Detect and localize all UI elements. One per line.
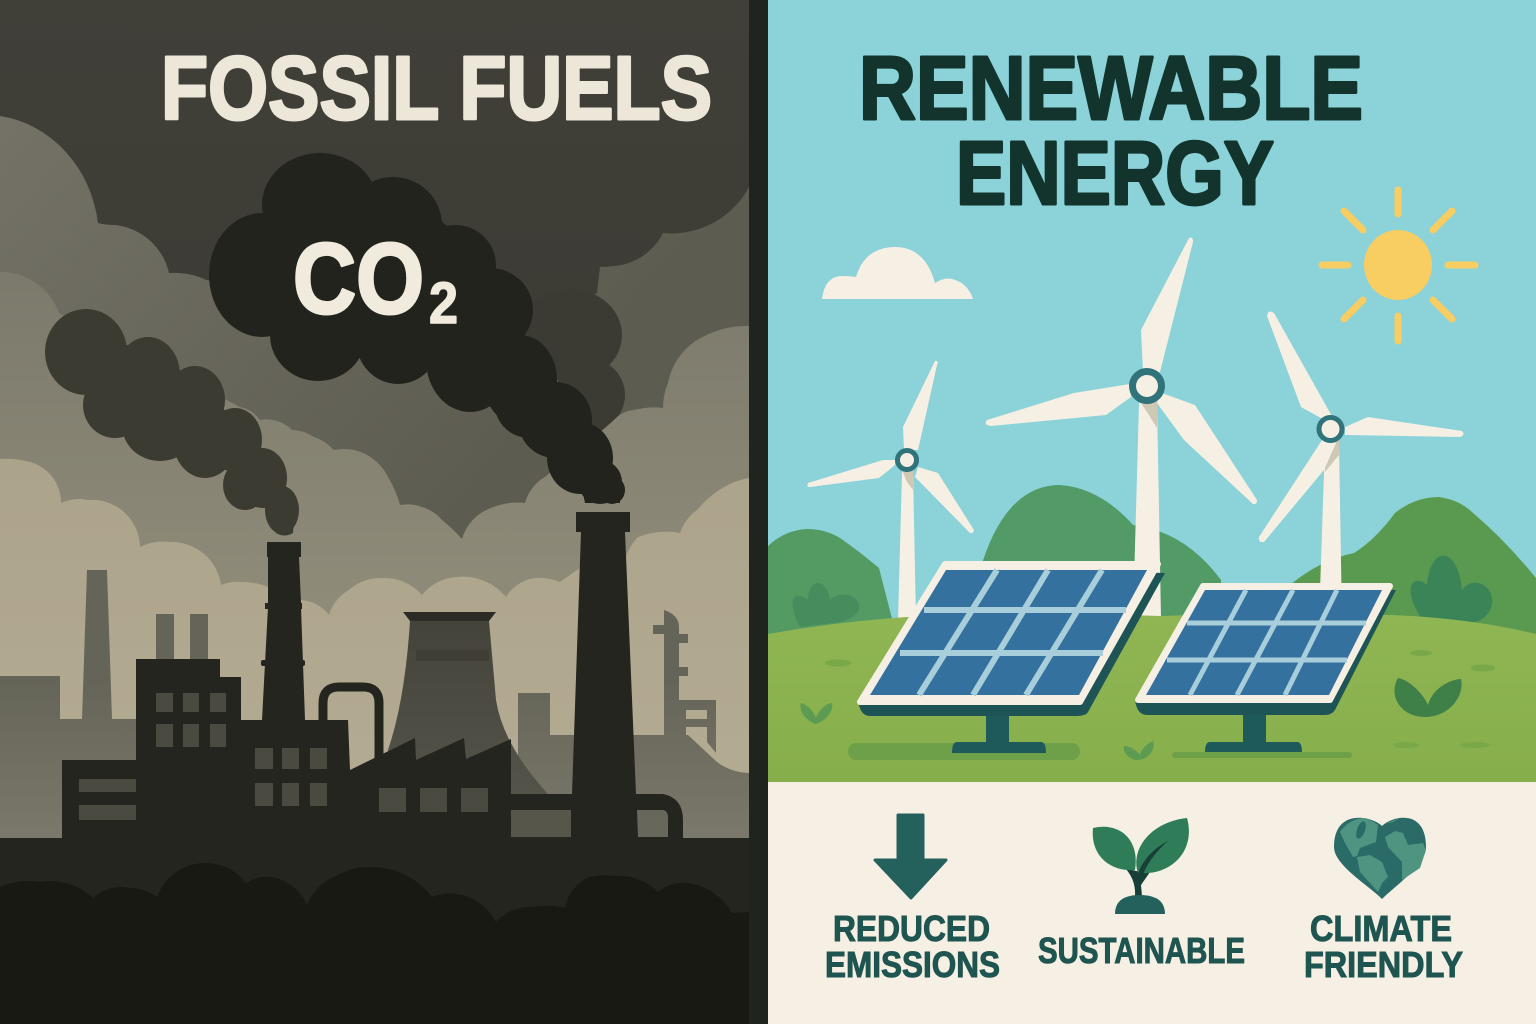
foreground factory skyline	[0, 512, 749, 1024]
heading: renewable energy: RENEWABLE	[859, 39, 1363, 139]
cloud layer: light smog	[0, 459, 749, 1024]
label: climate friendly	[1304, 908, 1463, 985]
wind turbine: right	[1259, 312, 1464, 620]
ground	[768, 614, 1536, 782]
wind turbine: centre	[986, 238, 1257, 618]
icon: sun	[1322, 190, 1475, 341]
benefits band	[768, 782, 1536, 1024]
label: reduced emissions	[825, 908, 1000, 985]
panel: fossil fuels	[0, 0, 749, 1024]
foreground dark clouds	[0, 863, 749, 1024]
bush: left	[792, 583, 859, 627]
smoke: small chimney plume	[45, 309, 299, 536]
heading: renewable energy	[859, 39, 1363, 224]
heading: fossil fuels: FOSSIL FUELS	[161, 39, 712, 139]
label: reduced emissions: EMISSIONS	[825, 944, 1000, 985]
grass details	[825, 650, 1495, 760]
cloud layer: dark smog	[0, 116, 749, 1024]
pipe loop	[323, 687, 379, 770]
panel: renewable energy	[768, 0, 1536, 1024]
background factory silhouettes, left	[0, 570, 208, 840]
icon: earth heart	[1334, 818, 1426, 899]
solar panel: right	[1135, 585, 1396, 752]
icon: down arrow	[875, 815, 946, 898]
heading: renewable energy: ENERGY	[956, 124, 1274, 224]
smoke: rear dark plume	[518, 289, 631, 485]
background factory silhouettes, right	[518, 610, 749, 840]
label: sustainable: SUSTAINABLE	[1038, 930, 1245, 971]
label: climate friendly: CLIMATE	[1310, 908, 1452, 949]
divider strip	[749, 0, 768, 1024]
label: climate friendly: FRIENDLY	[1304, 944, 1463, 985]
solar panel: left	[858, 564, 1165, 753]
sky	[768, 0, 1536, 782]
hills	[768, 485, 1536, 650]
icon: cloud	[822, 247, 973, 299]
icon: sprout	[1093, 818, 1189, 914]
wind turbine: left	[807, 361, 974, 620]
label: CO2: 2	[429, 271, 458, 336]
label: reduced emissions: REDUCED	[833, 908, 990, 949]
bush: right	[1411, 556, 1492, 623]
chimney collars	[261, 603, 305, 666]
factory windows	[79, 693, 668, 837]
smoke: CO2 cloud and plume	[209, 153, 625, 504]
cloud layer: mid grey smog	[0, 272, 749, 1024]
label: CO2: CO	[293, 223, 424, 335]
cooling tower	[380, 612, 548, 830]
small plants	[800, 678, 1462, 760]
